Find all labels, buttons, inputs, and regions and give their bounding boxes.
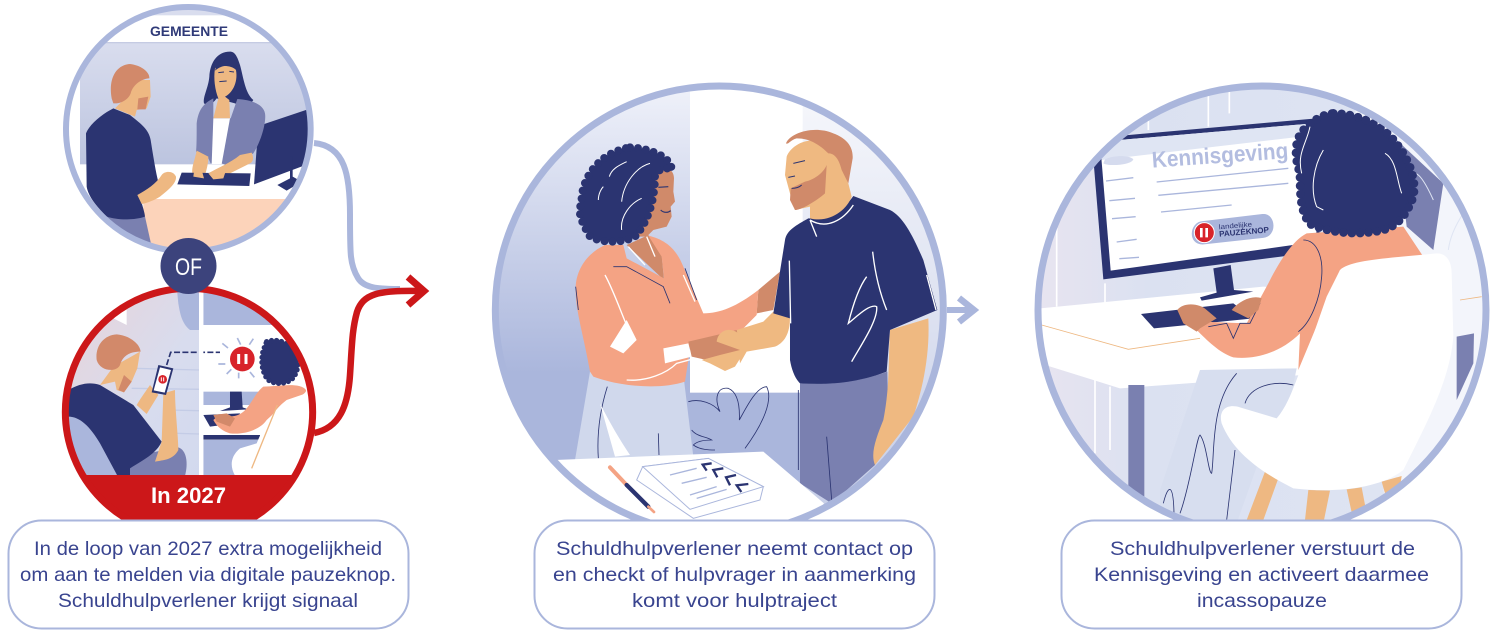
icon: monitor (1092, 118, 1320, 301)
connector: red arrow to next step (314, 277, 424, 433)
text box: step one: In de loop van 2027 extra mogelijkheid (34, 538, 382, 560)
panel: gemeente counter circle (63, 3, 313, 266)
icon: pauzeknop button (1191, 213, 1274, 245)
icon: keyboard (1141, 303, 1253, 328)
badge: OF (160, 238, 216, 294)
icon: pauzeknop button: PAUZEKNOP (1219, 225, 1270, 239)
red banner (86, 475, 292, 520)
text box: step one: Schuldhulpverlener krijgt signaal (58, 590, 358, 612)
icon: monitor (254, 109, 310, 191)
text box: step two: komt voor hulptraject (632, 590, 838, 612)
icon: woman at desk (203, 340, 307, 476)
icon: woman from behind (1177, 113, 1423, 370)
panel: handshake circle (490, 83, 949, 537)
text box: step one (8, 520, 408, 628)
icon: phone (152, 365, 173, 395)
icon: pen (610, 467, 654, 512)
panel: kennisgeving circle (1033, 83, 1490, 534)
icon: man with phone (68, 334, 187, 476)
icon: chair (68, 417, 117, 476)
icon: notebook (637, 458, 763, 518)
text box: step two: Schuldhulpverlener neemt contact op (556, 538, 913, 560)
text box: step two: en checkt of hulpvrager in aanmerking (553, 564, 916, 586)
text box: step three: Schuldhulpverlener verstuurt de (1110, 538, 1415, 560)
icon: man shaking hands (688, 130, 937, 503)
panel: digital pause button circle (63, 283, 317, 542)
icon: pauzeknop button: landelijke (1219, 221, 1253, 231)
connector: blue line from gemeente circle (314, 143, 400, 289)
badge: OF: OF (175, 254, 202, 281)
icon: plant (1397, 140, 1443, 250)
text: Kennisgeving: Kennisgeving (1151, 137, 1289, 173)
arrow: to step three (947, 298, 974, 322)
icon: visitor man (86, 64, 176, 247)
icon: dashed signal line (167, 352, 220, 365)
icon: woman shaking hands (575, 147, 780, 460)
text box: step three: incassopauze (1197, 590, 1327, 612)
icon: table (558, 452, 824, 520)
icon: desk (1040, 287, 1482, 498)
text box: step two (534, 520, 934, 628)
text box: step three (1062, 520, 1462, 628)
label: In 2027: In 2027 (151, 483, 226, 508)
text box: step one: om aan te melden via digitale pauzeknop. (20, 564, 396, 586)
text box: step three: Kennisgeving en activeert daarmee (1094, 564, 1429, 586)
icon: skirt and chair legs (1160, 368, 1402, 523)
icon: plant (688, 387, 769, 450)
heading: GEMEENTE sign: GEMEENTE (150, 23, 228, 39)
icon: keyboard (177, 173, 251, 186)
icon: clerk woman (192, 52, 265, 179)
icon: red pause button with rays (218, 338, 255, 378)
icon: white chair (1221, 253, 1453, 490)
